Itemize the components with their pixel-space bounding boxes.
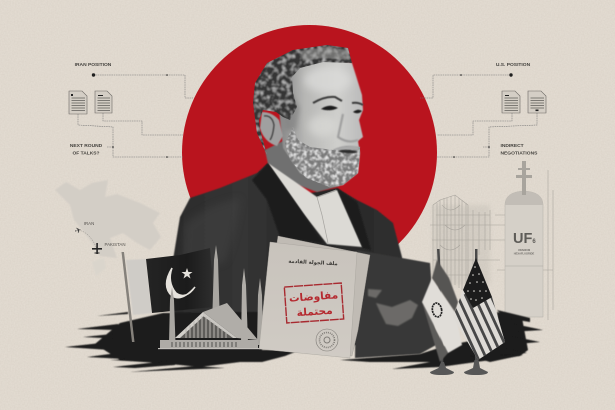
uranium cylinder bbox=[505, 161, 543, 317]
map: Iran and Pakistan bbox=[55, 180, 161, 276]
finial and pole bbox=[475, 249, 478, 366]
mouth bbox=[337, 150, 358, 153]
flag lower grey band bbox=[422, 302, 448, 362]
flag emblem bbox=[431, 302, 443, 318]
brush strokes left bbox=[65, 312, 300, 372]
hair bbox=[253, 45, 352, 155]
star bbox=[182, 268, 192, 278]
eyes bbox=[321, 106, 362, 113]
icon: document 2 bbox=[95, 91, 112, 113]
temple shadow bbox=[283, 90, 300, 130]
shirt bbox=[268, 163, 362, 247]
icon: plane near Iran: ✈ bbox=[73, 225, 83, 236]
right connector lines bbox=[420, 75, 537, 157]
flag white band bbox=[126, 259, 152, 315]
neck bbox=[265, 140, 340, 192]
cheek highlight bbox=[308, 115, 336, 137]
icon: document 1 bbox=[69, 91, 87, 114]
U.S. table flag bbox=[455, 249, 505, 375]
label: indirect negotiations: NEGOTIATIONS bbox=[500, 150, 538, 156]
flag dark stripes bbox=[455, 294, 505, 360]
nose shadow bbox=[338, 114, 358, 141]
label: next round of talks: OF TALKS? bbox=[72, 150, 100, 156]
jacket bbox=[172, 163, 404, 345]
icon: plane near Pakistan bbox=[92, 243, 102, 254]
dark folder with world map bbox=[355, 250, 436, 358]
portrait of man bbox=[172, 45, 404, 345]
flag light stripes bbox=[453, 290, 505, 360]
stand base bbox=[430, 362, 454, 375]
stamp: potential negotiations bbox=[284, 283, 344, 323]
stamp: potential negotiations: محتملة bbox=[296, 305, 333, 319]
facade bbox=[175, 312, 237, 338]
brush strokes right bbox=[340, 310, 543, 369]
red circle bbox=[182, 25, 437, 280]
stand base bbox=[464, 360, 488, 375]
connector nodes bbox=[92, 73, 513, 158]
cylinder caption: HEXAFLUORIDE bbox=[514, 252, 534, 256]
label: indirect negotiations: INDIRECT bbox=[500, 143, 524, 149]
folder front page bbox=[259, 242, 357, 358]
flag dark field bbox=[146, 248, 214, 313]
right lapel bbox=[337, 188, 371, 250]
heading: U.S. position: U.S. POSITION bbox=[496, 62, 531, 68]
seal emblem bbox=[316, 329, 338, 351]
roof bbox=[203, 303, 258, 340]
label: next round of talks: NEXT ROUND bbox=[70, 143, 103, 149]
finial and pole bbox=[437, 249, 444, 366]
map label: Pakistan: PAKISTAN bbox=[104, 242, 126, 247]
Pakistan flag bbox=[122, 248, 214, 342]
head skin bbox=[279, 58, 363, 187]
world map patch bbox=[376, 300, 418, 326]
folder back page bbox=[262, 236, 370, 356]
UF6 label: UF6 bbox=[513, 231, 536, 247]
flag pole bbox=[122, 252, 134, 342]
canton bbox=[463, 258, 492, 308]
beard bbox=[285, 127, 360, 187]
flag white band bbox=[422, 278, 462, 353]
cylinder valve bbox=[516, 161, 532, 195]
ear bbox=[260, 112, 283, 146]
flag dark top band bbox=[432, 260, 458, 312]
Iran table flag bbox=[422, 249, 462, 375]
cylinder caption: URANIUM bbox=[518, 248, 530, 252]
base colonnade bbox=[160, 340, 258, 348]
industrial plant sketch bbox=[430, 170, 553, 320]
heading: Iran position: IRAN POSITION bbox=[75, 62, 112, 68]
stamp: potential negotiations: مفاوضات bbox=[289, 289, 339, 305]
facade pillars bbox=[186, 316, 226, 338]
icon: document 4 bbox=[528, 91, 546, 113]
icon: document 3 bbox=[502, 91, 520, 113]
Faisal Mosque bbox=[158, 245, 263, 349]
left lapel bbox=[252, 163, 323, 243]
hair top highlight bbox=[300, 47, 350, 61]
canton stars bbox=[467, 266, 487, 301]
jacket fold highlight bbox=[182, 198, 240, 266]
crescent bbox=[166, 268, 195, 298]
forehead highlight bbox=[304, 67, 352, 93]
map label: Iran: IRAN bbox=[84, 221, 94, 226]
flight route bbox=[78, 230, 97, 249]
folder heading: ملف الجولة القادمة bbox=[288, 259, 338, 267]
minarets bbox=[169, 287, 176, 343]
eyebrows bbox=[313, 97, 363, 105]
moustache bbox=[332, 146, 360, 150]
left connector lines bbox=[78, 75, 193, 157]
